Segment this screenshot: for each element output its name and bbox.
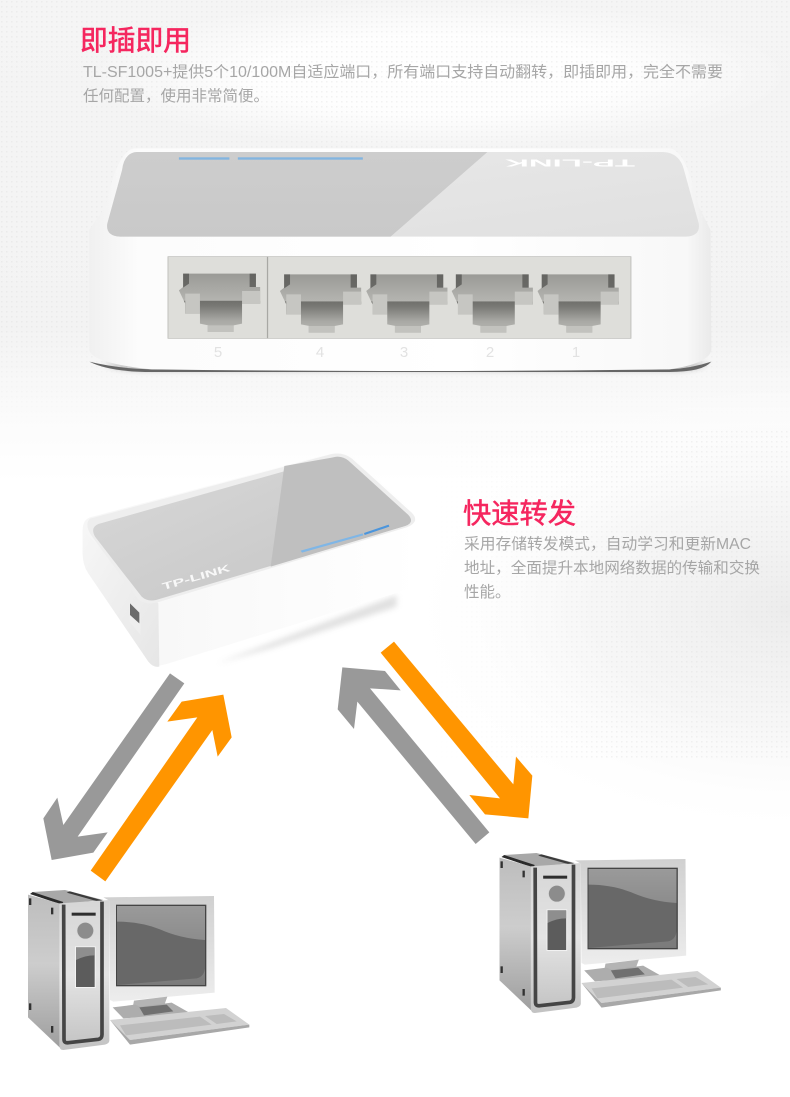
text block: fast forwarding description: [464, 535, 760, 601]
product: angled view of switch: [83, 452, 419, 667]
port numbers: 3: [400, 344, 408, 361]
port numbers: 4: [316, 344, 324, 361]
text block: plug and play description: TL-SF1005+提供5个10/100M自适应端口，所有端口支持自动翻转，即插即用，完全不需要: [83, 62, 723, 81]
switch top panel: [107, 152, 699, 237]
icon: right desktop computer: [499, 853, 721, 1013]
page background: [0, 0, 790, 758]
icon: left desktop computer: [28, 890, 249, 1050]
text block: fast forwarding description: 性能。: [464, 583, 511, 601]
arrow: gray left, switch to computer: [43, 673, 184, 860]
switch port panel: [168, 257, 631, 338]
switch logo: TP-LINK: [502, 156, 635, 168]
arrow: gray right, computer to switch: [338, 667, 489, 844]
text block: plug and play description: [83, 62, 723, 105]
port numbers: 1: [572, 344, 580, 361]
text block: fast forwarding description: 采用存储转发模式，自动学习和更新MAC: [464, 535, 751, 553]
text block: fast forwarding description: 地址，全面提升本地网络数据的传输和交换: [464, 559, 760, 577]
heading: plug and play: 即插即用: [80, 25, 191, 56]
arrow: orange left, computer to switch: [91, 695, 232, 881]
port numbers: [214, 344, 580, 361]
arrow: orange right, switch to computer: [381, 642, 532, 818]
text block: plug and play description: 任何配置，使用非常简便。: [83, 87, 269, 105]
port numbers: 5: [214, 344, 222, 361]
product: front view of switch: [89, 148, 711, 372]
heading: fast forwarding: 快速转发: [463, 498, 576, 529]
product: angled view of switch: TP-LINK: [161, 563, 233, 593]
port numbers: 2: [486, 344, 494, 361]
